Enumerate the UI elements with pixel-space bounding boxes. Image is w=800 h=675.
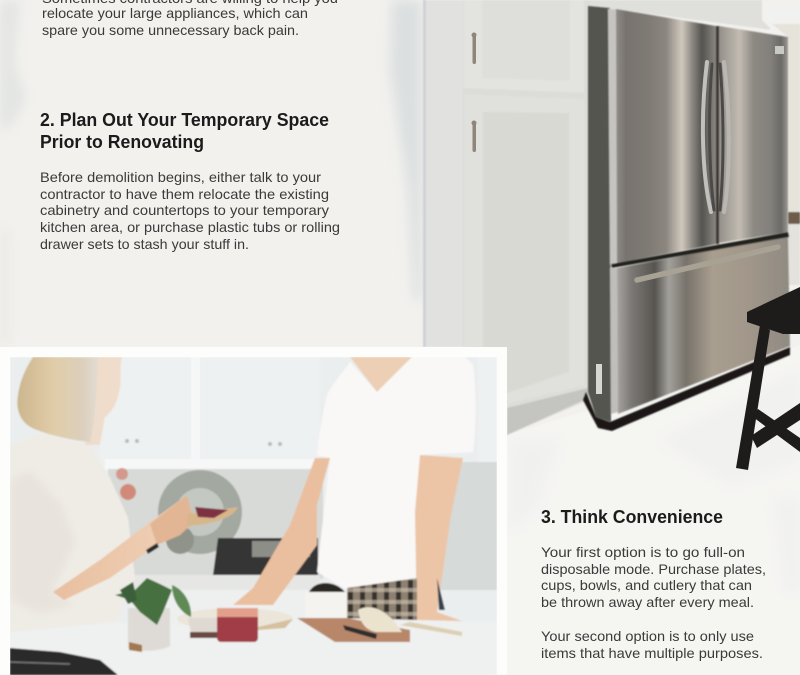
icon: fridge handles	[703, 62, 729, 212]
icon: freezer handle	[637, 247, 778, 280]
top cabinets	[590, 0, 772, 30]
dish and jam jar	[188, 618, 217, 638]
text block: step 2: Before demolition begins, either talk to your	[40, 169, 321, 185]
kitchen background	[10, 357, 497, 675]
stove	[213, 538, 318, 575]
text block: step 2	[40, 169, 340, 252]
cutting board with bread	[297, 618, 410, 642]
man arms	[233, 458, 330, 605]
woman sweater	[10, 433, 135, 632]
cabinetry	[423, 0, 600, 435]
text block: step 3: Your first option is to go full-on	[541, 544, 745, 560]
text block: step 3: Your second option is to only use	[541, 628, 754, 644]
text block: step 3: cups, bowls, and cutlery that can	[541, 577, 752, 593]
fridge freezer drawer	[617, 236, 790, 414]
counter	[10, 618, 497, 675]
upper cabinets	[100, 357, 320, 469]
text block: step 2: drawer sets to stash your stuff in.	[40, 236, 249, 252]
potted plant	[128, 608, 170, 651]
woman arm and hand	[53, 495, 194, 600]
wreath	[158, 470, 242, 554]
top text block: relocate your large appliances, which can	[42, 5, 308, 21]
shorts	[347, 578, 417, 622]
tile backsplash	[108, 469, 323, 579]
upper cabinet door	[464, 0, 584, 93]
fridge left door	[616, 9, 717, 263]
fridge right door	[719, 26, 788, 243]
heading: step 2	[40, 110, 329, 152]
stove corner	[10, 648, 118, 675]
text block: step 3: be thrown away after every meal.	[541, 594, 754, 610]
icon: black stool	[736, 287, 800, 470]
flowers	[116, 468, 128, 480]
text block: step 2: contractor to have them relocate the existing	[40, 186, 329, 202]
woman face and hair	[92, 357, 122, 420]
top text block: spare you some unnecessary back pain.	[42, 22, 299, 38]
panel: couple photo with white frame	[0, 347, 507, 675]
panel: kitchen photo with refrigerator	[423, 0, 800, 470]
plate	[177, 608, 293, 630]
toast	[187, 507, 238, 526]
icon: cabinet handles	[472, 32, 476, 152]
heading: step 3: 3. Think Convenience	[541, 507, 723, 527]
man t-shirt	[350, 357, 412, 392]
heading: step 2: 2. Plan Out Your Temporary Space	[40, 110, 329, 130]
bowl of berries	[305, 592, 347, 621]
text block: step 3: items that have multiple purposes.	[541, 645, 763, 661]
lower cabinet door	[464, 94, 585, 404]
text block: step 3	[541, 544, 766, 661]
text block: step 2: cabinetry and countertops to your temporary	[40, 202, 329, 218]
text block: step 3: disposable mode. Purchase plates,	[541, 561, 766, 577]
top text block	[42, 0, 338, 38]
text block: step 2: kitchen area, or purchase plastic tubs or rolling	[40, 219, 340, 235]
fridge shadow side	[588, 6, 611, 422]
heading: step 2: Prior to Renovating	[40, 132, 204, 152]
